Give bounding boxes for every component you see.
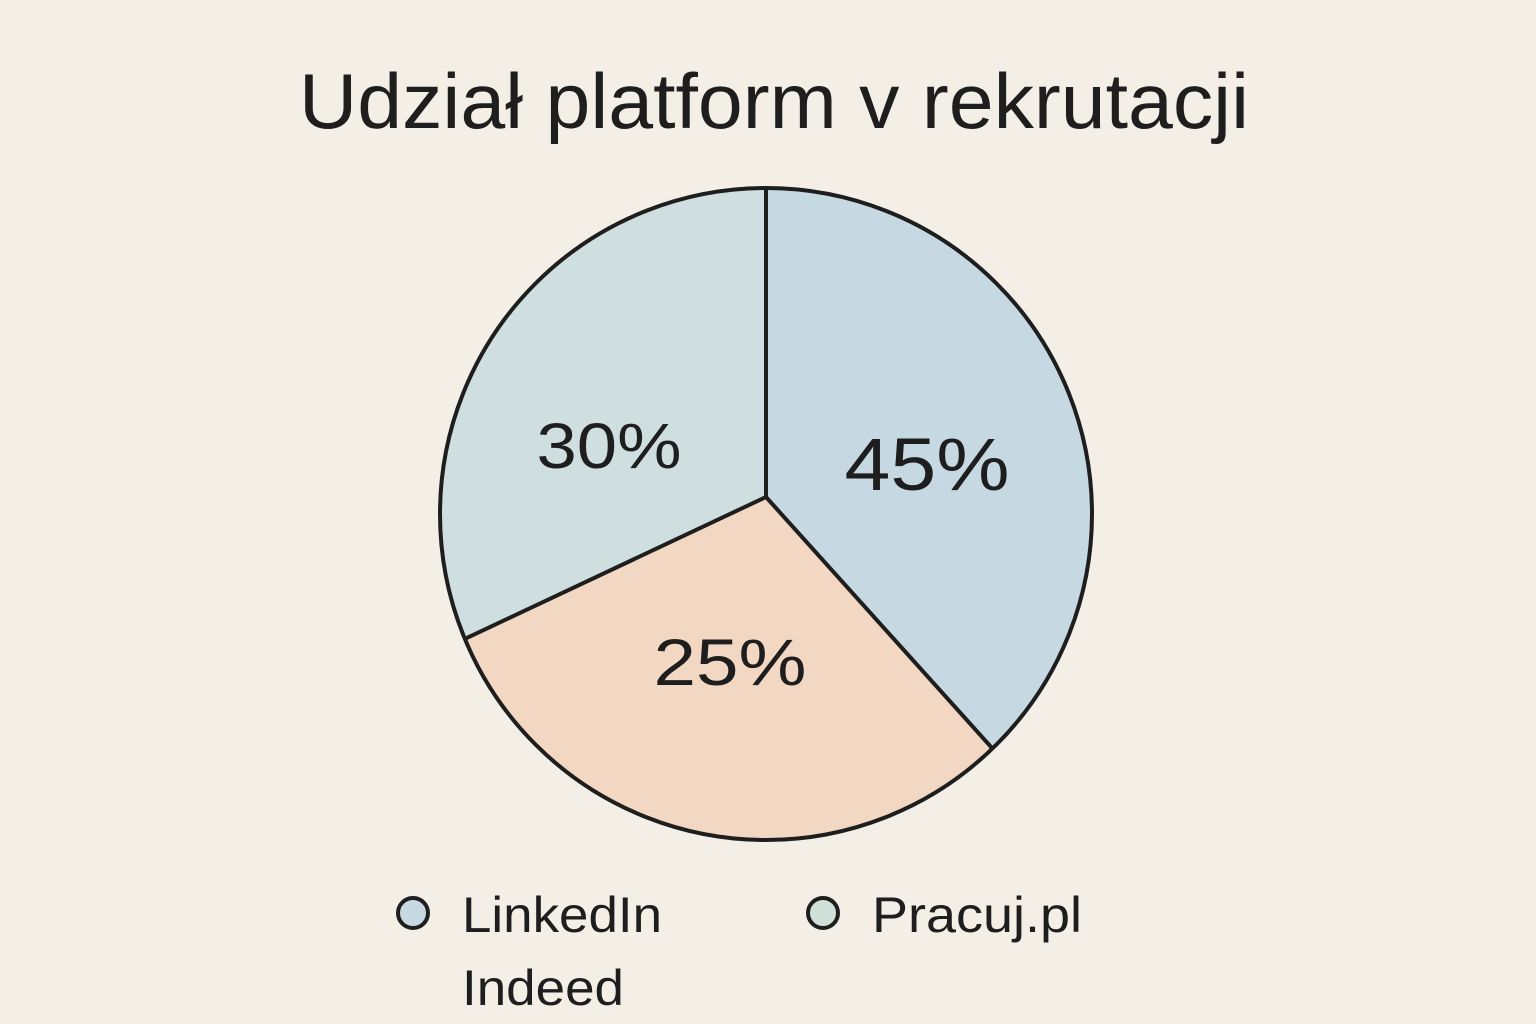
label: 45%: 45%	[844, 423, 1010, 506]
legend: Indeed: Indeed	[462, 960, 624, 1016]
pie chart	[438, 186, 1094, 842]
legend: LinkedIn: LinkedIn	[462, 887, 662, 943]
slice: 25%	[468, 500, 990, 838]
legend	[398, 887, 1082, 1016]
label: 25%: 25%	[654, 625, 806, 699]
slice: 45%	[768, 190, 1090, 746]
legend: Pracuj.pl: Pracuj.pl	[872, 887, 1082, 943]
title: Udział platform v rekrutacji	[299, 57, 1249, 145]
label: 30%: 30%	[536, 410, 682, 482]
slice: 30%	[442, 190, 764, 636]
